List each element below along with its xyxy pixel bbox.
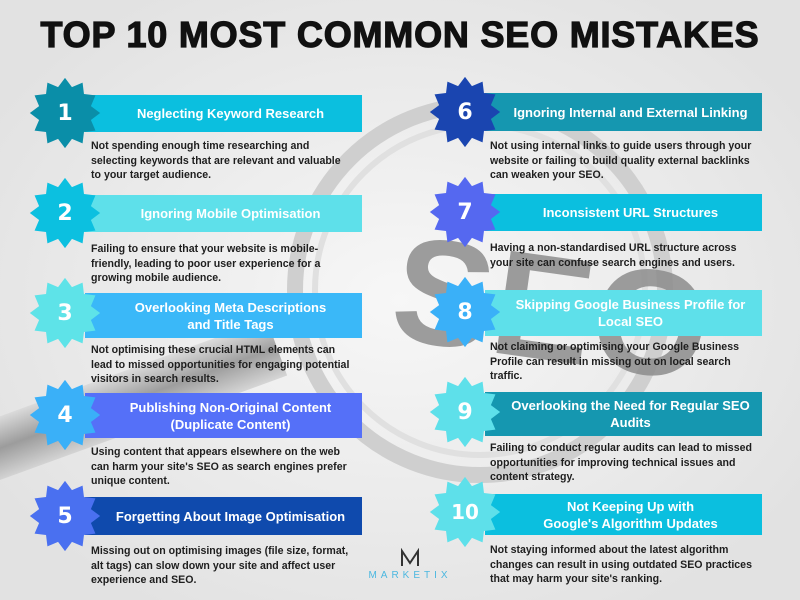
banner 2	[85, 195, 362, 232]
banner 5: Forgetting About Image Optimisation	[116, 508, 345, 524]
banner 3: Overlooking Meta Descriptions	[135, 300, 326, 314]
badge 6: 6	[457, 100, 473, 124]
banner 8: Skipping Google Business Profile for	[516, 297, 745, 312]
item 5	[30, 481, 362, 586]
item 10	[430, 477, 762, 585]
banner 1	[85, 95, 362, 132]
item 3	[30, 278, 362, 385]
desc 8: Not claiming or optimising your Google Business Profile can result in missing out on local search traffic.	[490, 341, 739, 382]
banner 1: Neglecting Keyword Research	[137, 106, 324, 121]
banner 4: Publishing Non-Original Content	[130, 400, 331, 414]
banner 6: Ignoring Internal and External Linking	[513, 104, 748, 120]
banner 10	[485, 494, 762, 535]
desc 6: Not using internal links to guide users through your website or failing to build quality external backlinks can weaken your SEO.	[490, 140, 751, 181]
badge 2	[30, 178, 100, 248]
badge 1	[30, 78, 100, 148]
banner 8	[485, 290, 762, 336]
item 9	[430, 377, 762, 483]
badge 4: 4	[57, 402, 73, 428]
badge 6	[430, 77, 500, 147]
background: magnifying glass: SEO	[383, 203, 720, 413]
badge 9: 9	[457, 400, 473, 424]
banner 5	[85, 497, 362, 535]
badge 3	[30, 278, 100, 348]
desc 5: Missing out on optimising images (file size, format, alt tags) can slow down your site and affect user experience and SEO.	[91, 545, 348, 586]
desc 10: Not staying informed about the latest algorithm changes can result in using outdated SEO practices that may harm your site's ranking.	[490, 544, 752, 585]
badge 9	[430, 377, 500, 447]
desc 4: Using content that appears elsewhere on the web can harm your site's SEO as search engines prefer unique content.	[91, 446, 347, 487]
desc 1: Not spending enough time researching and selecting keywords that are relevant and valuable to your target audience.	[91, 140, 341, 181]
banner 6	[485, 93, 762, 131]
item 4	[30, 380, 362, 487]
badge 7	[430, 177, 500, 247]
badge 10	[430, 477, 500, 547]
banner 3	[85, 293, 362, 338]
badge 10: 10	[451, 500, 479, 524]
banner 3: and Title Tags	[187, 316, 274, 332]
item 8	[430, 277, 762, 382]
banner 7	[485, 194, 762, 231]
badge 1: 1	[57, 100, 73, 126]
banner 2: Ignoring Mobile Optimisation	[141, 206, 320, 221]
badge 5	[30, 481, 100, 551]
title: TOP 10 MOST COMMON SEO MISTAKES	[41, 14, 759, 55]
desc 7: Having a non-standardised URL structure across your site can confuse search engines and users.	[490, 242, 736, 268]
item 1	[30, 78, 362, 181]
item 7	[430, 177, 762, 268]
item 6	[430, 77, 762, 181]
badge 8: 8	[457, 300, 473, 324]
banner 4	[85, 393, 362, 438]
badge 7: 7	[457, 200, 473, 224]
item 2	[30, 178, 362, 284]
badge 4	[30, 380, 100, 450]
badge 3: 3	[57, 300, 73, 326]
banner 10: Google's Algorithm Updates	[543, 516, 718, 530]
banner 9: Audits	[610, 415, 651, 430]
banner 8: Local SEO	[598, 314, 663, 329]
banner 10: Not Keeping Up with	[567, 498, 694, 514]
logo: Marketix: MARKETIX	[368, 570, 452, 581]
banner 4: (Duplicate Content)	[171, 416, 290, 432]
desc 3: Not optimising these crucial HTML elements can lead to missed opportunities for engaging potential visitors in search results.	[91, 344, 349, 385]
banner 9	[485, 392, 762, 436]
badge 2: 2	[57, 200, 73, 226]
desc 9: Failing to conduct regular audits can lead to missed opportunities for improving technical issues and content strategy.	[490, 442, 752, 483]
badge 8	[430, 277, 500, 347]
logo: Marketix	[368, 548, 452, 581]
banner 7: Inconsistent URL Structures	[543, 205, 718, 220]
desc 2: Failing to ensure that your website is mobile-friendly, leading to poor user experience for a growing mobile audience.	[91, 243, 320, 284]
badge 5: 5	[57, 504, 73, 528]
banner 9: Overlooking the Need for Regular SEO	[511, 398, 750, 413]
